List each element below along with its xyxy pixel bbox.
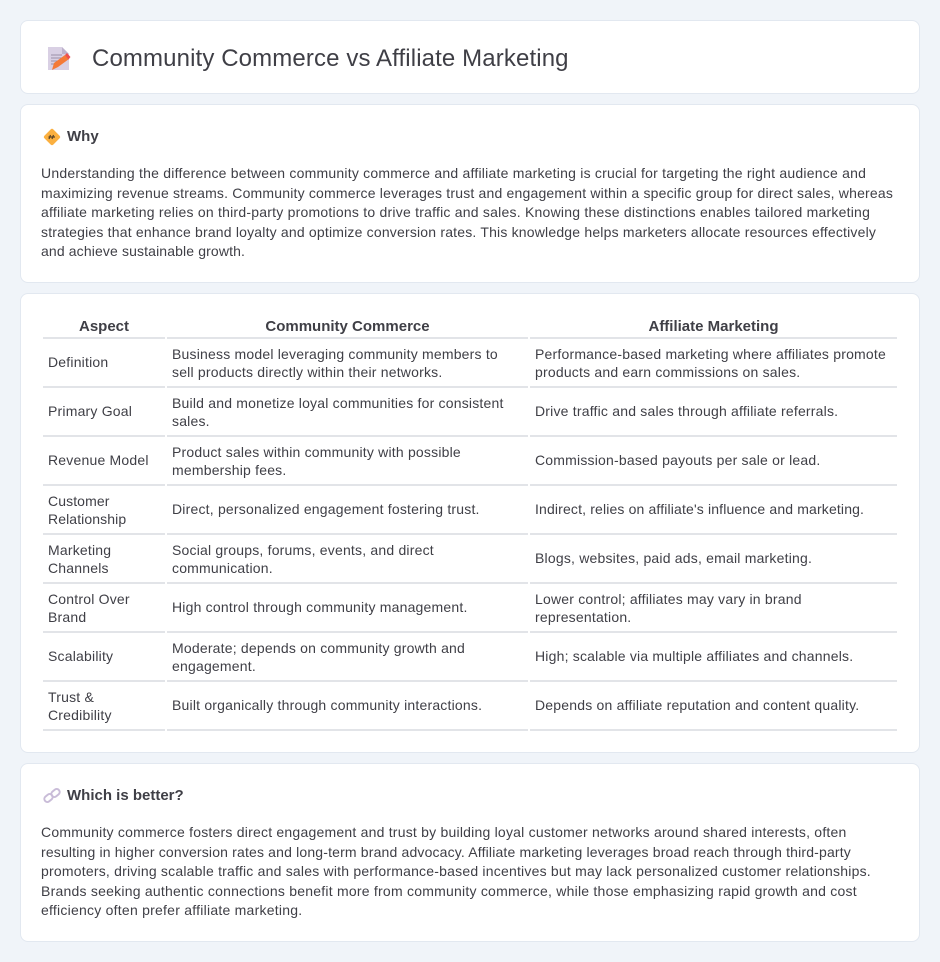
row: marketing channels: Channels <box>48 560 109 576</box>
cell: goal affiliate: Drive traffic and sales through affiliate referrals. <box>535 403 838 419</box>
panel: why <box>20 104 920 283</box>
row: marketing channels: Marketing <box>48 542 111 558</box>
table header: affiliate marketing: Affiliate Marketing <box>648 318 779 335</box>
icon: memo with pencil <box>48 47 70 70</box>
title: Community Commerce vs Affiliate Marketing <box>92 45 569 72</box>
row: marketing channels <box>48 542 111 576</box>
text block: which is better <box>41 824 871 918</box>
cell: trust community: Built organically through community interactions. <box>172 697 482 713</box>
cell: goal community: sales. <box>172 413 210 429</box>
row: customer relationship: Relationship <box>48 511 126 527</box>
cell: definition community: Business model leveraging community members to <box>172 346 498 362</box>
cell: goal community: Build and monetize loyal communities for consistent <box>172 395 504 411</box>
row: customer relationship <box>48 493 126 527</box>
cell: channels community: Social groups, forums, events, and direct <box>172 542 434 558</box>
cell: revenue community: Product sales within community with possible <box>172 444 461 460</box>
row: customer relationship: Customer <box>48 493 109 509</box>
text block: which is better: promoters, driving scalable traffic and sales with performance-based incentives but may lack personalized customer relationships. <box>41 863 871 879</box>
cell: control affiliate: representation. <box>535 609 631 625</box>
row: trust and credibility: Trust & <box>48 689 94 705</box>
cell: control community: High control through community management. <box>172 599 468 615</box>
text block: why: Understanding the difference between community commerce and affiliate marketing is crucial for targeting the right audience and <box>41 165 866 181</box>
cell: scalability community: engagement. <box>172 658 256 674</box>
row: primary goal: Primary Goal <box>48 403 132 419</box>
cell: channels affiliate: Blogs, websites, paid ads, email marketing. <box>535 550 812 566</box>
panel: which is better <box>20 763 920 942</box>
text block: why: and achieve sustainable growth. <box>41 243 245 259</box>
text block: which is better: resulting in higher conversion rates and long-term brand advocacy. Affiliate marketing leverages broad reach through third-party <box>41 844 851 860</box>
cell: revenue affiliate: Commission-based payouts per sale or lead. <box>535 452 820 468</box>
cell: relationship affiliate: Indirect, relies on affiliate's influence and marketing. <box>535 501 864 517</box>
cell: definition community <box>172 346 498 380</box>
cell: scalability community <box>172 640 465 674</box>
panel: header <box>20 20 920 94</box>
row: scalability: Scalability <box>48 648 113 664</box>
cell: revenue community: membership fees. <box>172 462 286 478</box>
table header: aspect: Aspect <box>79 318 129 335</box>
row: control over brand: Control Over <box>48 591 130 607</box>
cell: channels community: communication. <box>172 560 273 576</box>
cell: trust affiliate: Depends on affiliate reputation and content quality. <box>535 697 859 713</box>
text block: why: strategies that enhance brand loyalty and optimize conversion rates. This knowledge helps marketers allocate resources effectively <box>41 224 876 240</box>
text block: which is better: Community commerce fosters direct engagement and trust by building loyal customer networks around shared interests, often <box>41 824 847 840</box>
heading: which is better: Which is better? <box>67 787 184 804</box>
cell: scalability affiliate: High; scalable via multiple affiliates and channels. <box>535 648 853 664</box>
heading: why: Why <box>67 128 99 145</box>
cell: revenue community <box>172 444 461 478</box>
table header: community commerce: Community Commerce <box>265 318 430 335</box>
icon: link <box>43 788 61 803</box>
text block: which is better: efficiency often prefer affiliate marketing. <box>41 902 302 918</box>
text block: why: maximizing revenue streams. Community commerce leverages trust and engagement within a specific group for direct sales, whereas <box>41 185 893 201</box>
row: control over brand: Brand <box>48 609 86 625</box>
cell: definition affiliate: products and earn commissions on sales. <box>535 364 800 380</box>
row: revenue model: Revenue Model <box>48 452 149 468</box>
cell: scalability community: Moderate; depends on community growth and <box>172 640 465 656</box>
cell: relationship community: Direct, personalized engagement fostering trust. <box>172 501 480 517</box>
cell: control affiliate: Lower control; affiliates may vary in brand <box>535 591 802 607</box>
row: definition: Definition <box>48 354 108 370</box>
cell: goal community <box>172 395 504 429</box>
row: trust and credibility: Credibility <box>48 707 112 723</box>
row: control over brand <box>48 591 130 625</box>
text block: why <box>41 165 893 259</box>
panel: comparison table <box>20 293 920 753</box>
cell: definition community: sell products directly within their networks. <box>172 364 442 380</box>
text block: why: affiliate marketing relies on third-party promotions to drive traffic and sales. Knowing these distinctions enables tailored marketing <box>41 204 870 220</box>
text block: which is better: Brands seeking authentic connections benefit more from community commerce, while those emphasizing rapid growth and cost <box>41 883 857 899</box>
row: trust and credibility <box>48 689 112 723</box>
cell: definition affiliate <box>535 346 886 380</box>
cell: definition affiliate: Performance-based marketing where affiliates promote <box>535 346 886 362</box>
cell: channels community <box>172 542 434 576</box>
cell: control affiliate <box>535 591 802 625</box>
icon: construction sign <box>44 128 60 146</box>
